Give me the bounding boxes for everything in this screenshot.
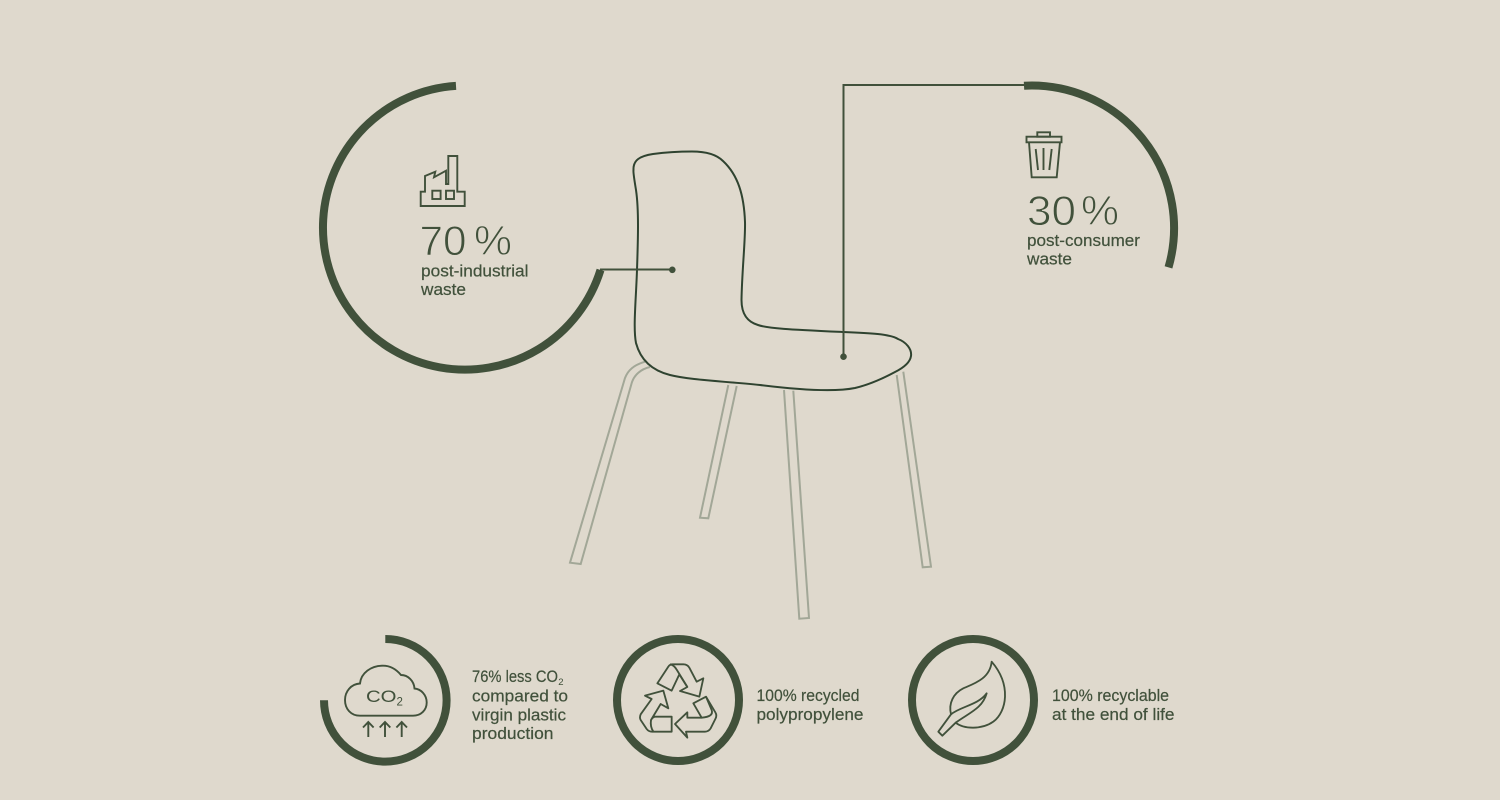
label: post-industrial waste: waste [420, 281, 466, 299]
stat: 70 percent [420, 217, 512, 264]
icon: leaf [938, 662, 1005, 736]
connector line to chair seat [840, 85, 1025, 360]
panel: post-industrial waste [323, 86, 676, 370]
progress arc 30 percent [1024, 85, 1174, 267]
label: 100 percent recycled polypropylene: polypropylene [756, 706, 864, 724]
chair illustration [570, 152, 931, 619]
label: post-consumer waste: waste [1026, 251, 1072, 269]
chair legs [570, 362, 931, 619]
ring [617, 639, 739, 761]
panel: CO2 reduction [324, 639, 568, 762]
icon: CO2 cloud with arrows: 2 [396, 696, 403, 708]
label: 76 percent less CO2: 76% less CO [472, 668, 558, 686]
icon: CO2 cloud with arrows [345, 666, 427, 737]
label: post-consumer waste: post-consumer [1027, 232, 1141, 250]
ring [912, 639, 1034, 761]
label: 76 percent less CO2: compared to [472, 688, 568, 706]
stat: 30 percent: % [1081, 187, 1119, 234]
icon: recycling arrows [640, 664, 716, 738]
progress ring 76 percent [324, 639, 447, 762]
label: 100 percent recycled polypropylene: 100% recycled [756, 687, 860, 705]
panel: recycled polypropylene [617, 639, 864, 761]
label: 100 percent recyclable at the end of life: at the end of life [1052, 706, 1174, 724]
label: 100 percent recyclable at the end of life: 100% recyclable [1052, 687, 1169, 705]
stat: 30 percent [1027, 187, 1119, 234]
icon: CO2 cloud with arrows: CO [366, 687, 396, 706]
stat: 70 percent: % [474, 217, 512, 264]
stat: 30 percent: 30 [1027, 187, 1076, 234]
panel: post-consumer waste [840, 85, 1174, 360]
panel: recyclable at end of life [912, 639, 1174, 761]
label: post-industrial waste: post-industrial [421, 263, 528, 281]
stat: 70 percent: 70 [420, 217, 466, 264]
label: 76 percent less CO2 [472, 668, 568, 743]
connector line to chair back [600, 266, 676, 273]
progress arc 70 percent [323, 86, 600, 370]
label: 76 percent less CO2: production [472, 725, 554, 743]
label: 76 percent less CO2: virgin plastic [472, 706, 566, 724]
icon: trash bin [1026, 132, 1062, 177]
label: 76 percent less CO2: 2 [558, 677, 564, 688]
icon: factory [421, 156, 465, 206]
chair shell [633, 152, 911, 390]
